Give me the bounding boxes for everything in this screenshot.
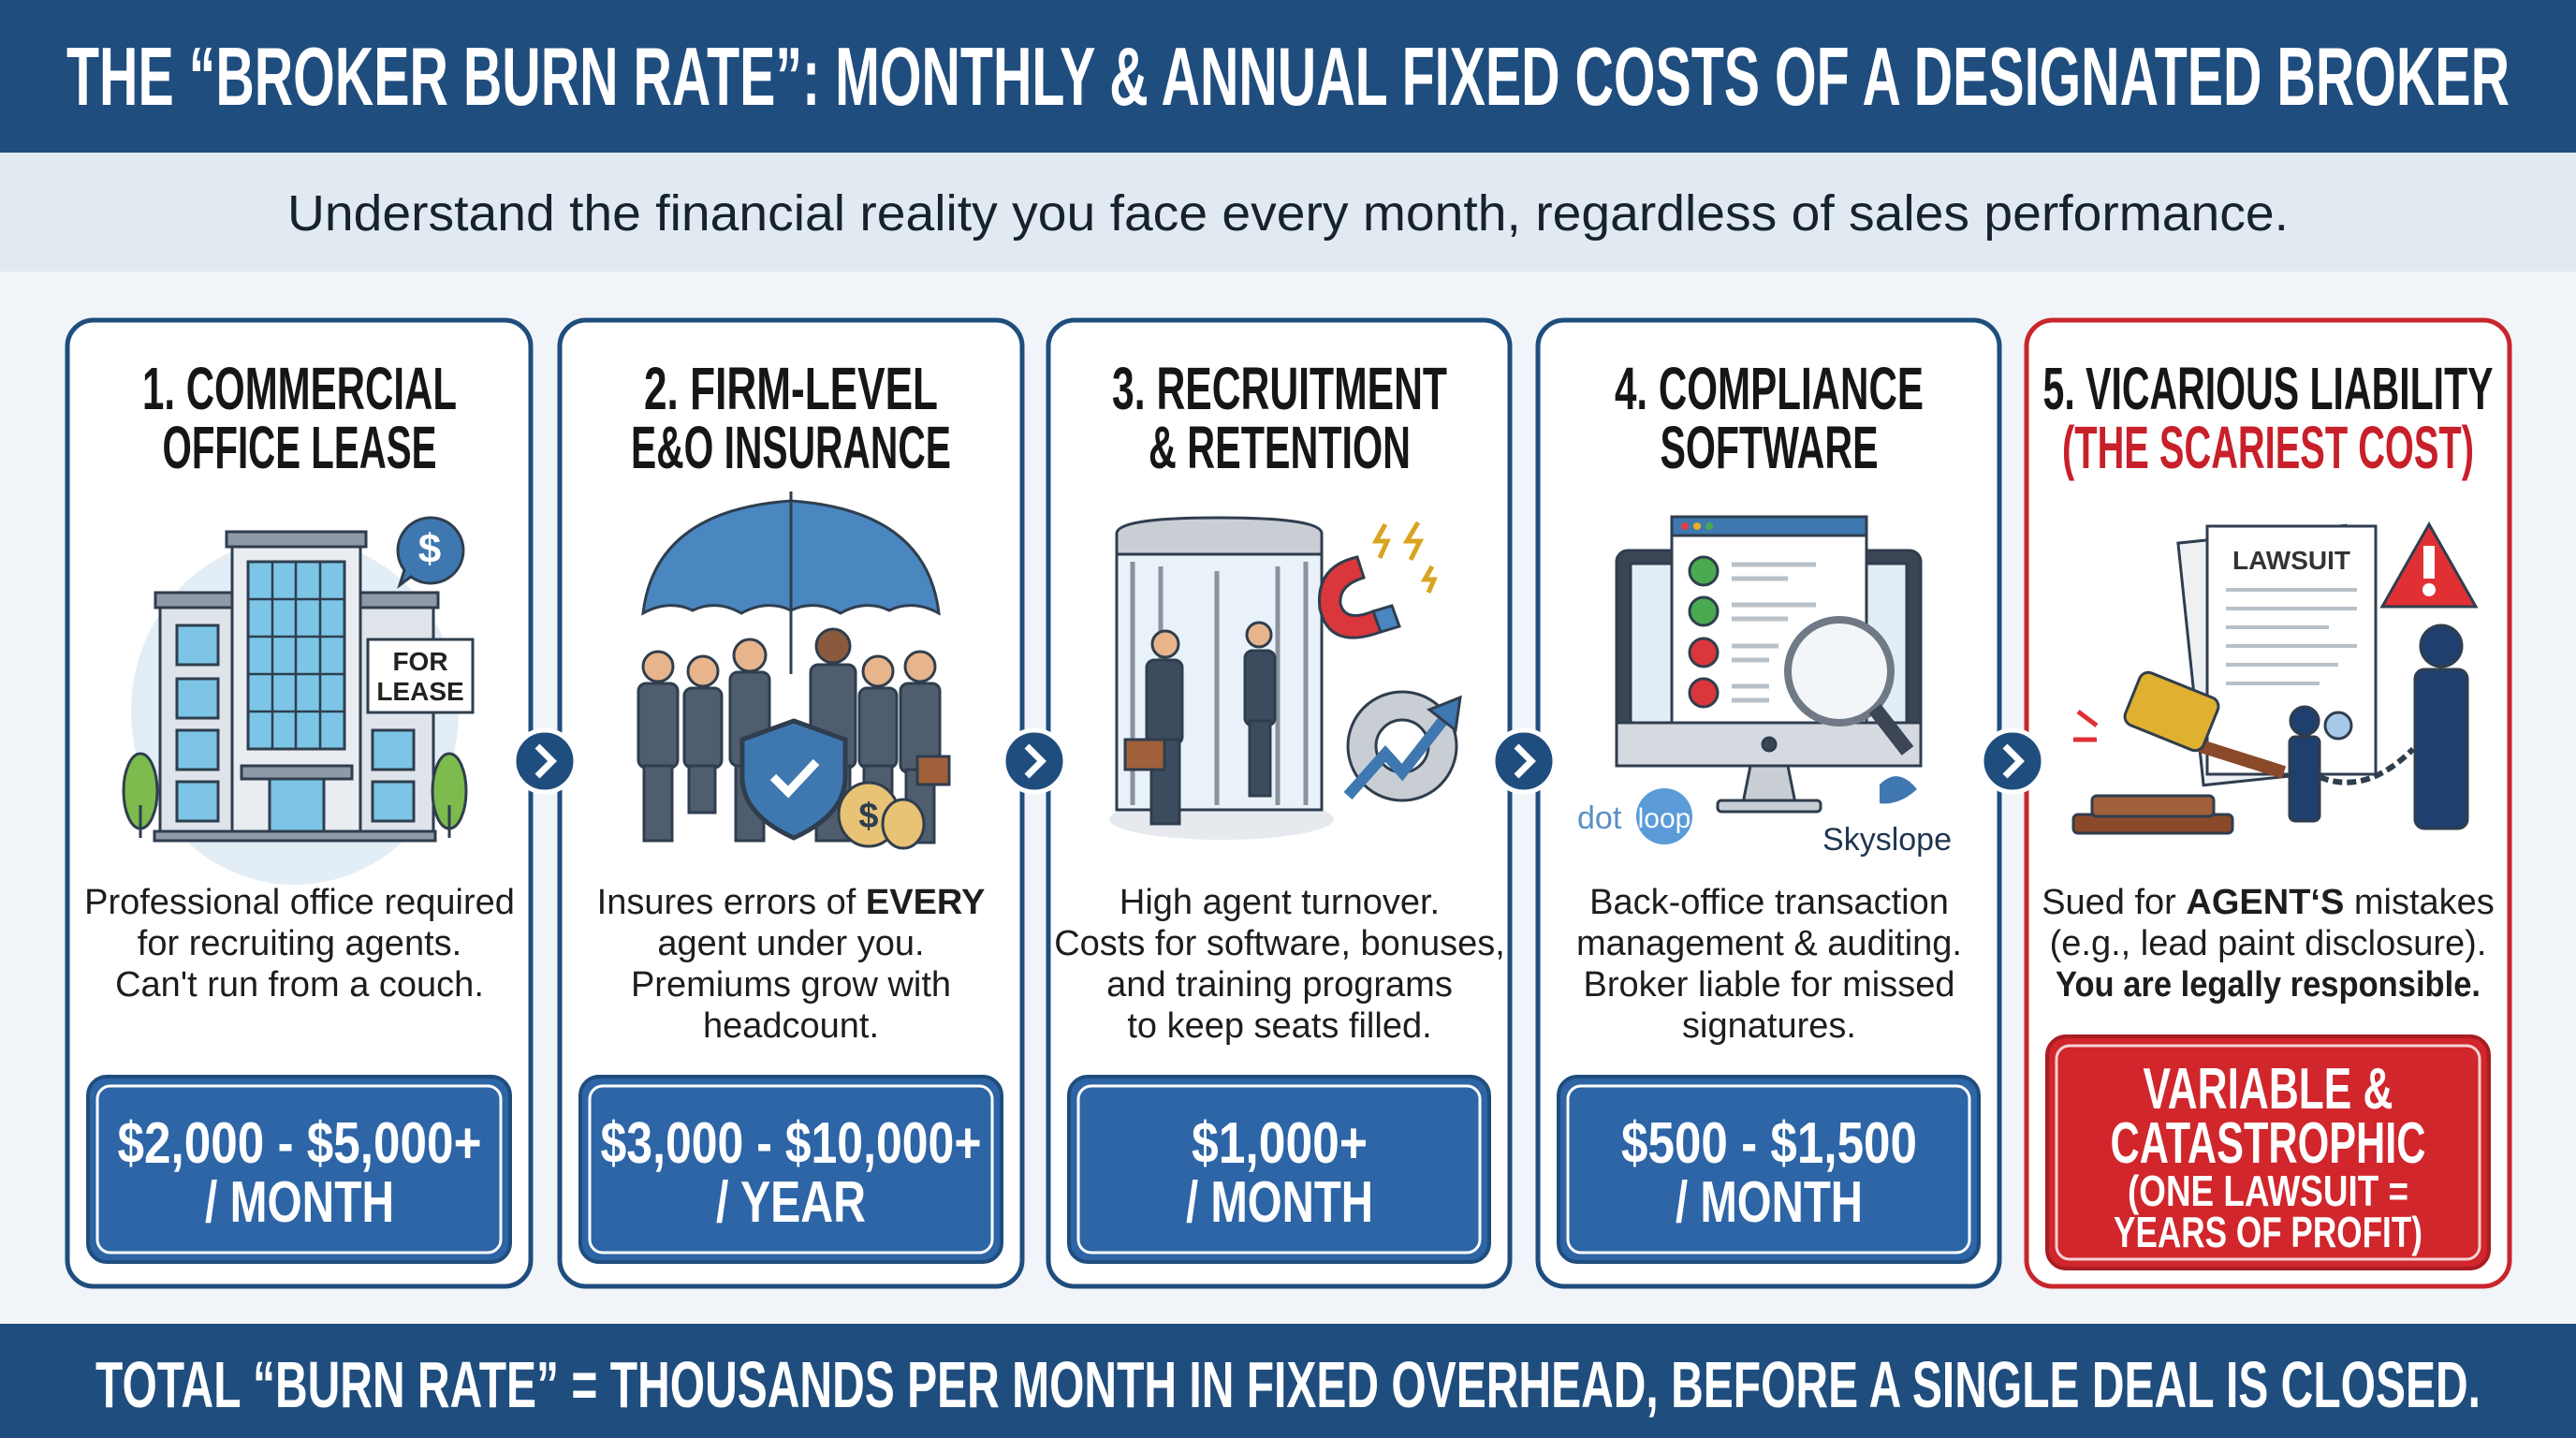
panel: E&O insurance — [560, 320, 1022, 1286]
icon: office building: LEASE — [376, 677, 464, 706]
heading: card 4 — [1615, 355, 1924, 481]
price: card 4 — [1559, 1077, 1979, 1262]
panel: compliance software — [1538, 320, 1999, 1286]
icon: lawsuit, gavel, warning — [2073, 524, 2476, 833]
text: card 4 description — [1576, 883, 1962, 1046]
subtitle: Understand the financial reality you face every month, regardless of sales performance. — [287, 185, 2289, 242]
panel: vicarious liability — [2027, 320, 2510, 1286]
price: card 2: $3,000 - $10,000+ — [601, 1111, 981, 1176]
text: card 5 description — [2042, 883, 2495, 1005]
icon: umbrella over team: $ — [858, 797, 879, 836]
text: card 1 description: Can't run from a couch. — [115, 965, 484, 1005]
arrow: 1 to 2 — [514, 730, 576, 792]
heading: card 3 — [1112, 355, 1447, 481]
icon: umbrella over team — [638, 492, 949, 848]
text: card 4 description: Back-office transaction — [1589, 883, 1949, 922]
text: card 3 description: and training programs — [1106, 965, 1453, 1005]
text: card 2 description: Insures errors of EVERY — [597, 883, 985, 922]
heading: card 1: OFFICE LEASE — [163, 414, 436, 481]
heading: card 3: & RETENTION — [1149, 414, 1411, 481]
heading: card 2: E&O INSURANCE — [631, 414, 951, 481]
text: card 3 description: to keep seats filled. — [1127, 1006, 1432, 1046]
text: card 1 description: for recruiting agents. — [138, 924, 461, 963]
icon: monitor with checklist: loop — [1638, 803, 1690, 834]
arrow: 3 to 4 — [1493, 730, 1555, 792]
text: card 2 description: Premiums grow with — [631, 965, 951, 1005]
panel: recruitment & retention — [1048, 320, 1510, 1286]
heading: card 1 — [142, 355, 457, 481]
text: card 5 description: Sued for AGENT‘S mistakes — [2042, 883, 2495, 922]
heading: card 1: 1. COMMERCIAL — [142, 355, 457, 422]
icon: lawsuit, gavel, warning: LAWSUIT — [2232, 546, 2350, 575]
price: card 3: $1,000+ — [1192, 1111, 1368, 1176]
text: card 2 description: headcount. — [703, 1006, 879, 1046]
price: card 1 — [88, 1077, 510, 1262]
price: card 5: CATASTROPHIC — [2110, 1111, 2426, 1176]
heading: card 3: 3. RECRUITMENT — [1112, 355, 1447, 422]
icon: monitor with checklist: dot — [1577, 800, 1622, 836]
price: card 4: / MONTH — [1676, 1170, 1863, 1235]
price: card 3 — [1069, 1077, 1489, 1262]
icon: office building — [124, 518, 473, 885]
price: card 5: VARIABLE & — [2144, 1057, 2393, 1122]
text: card 5 description: You are legally responsible. — [2056, 965, 2481, 1005]
subtitle — [0, 153, 2576, 271]
price: card 4: $500 - $1,500 — [1621, 1111, 1917, 1176]
heading: card 2: 2. FIRM-LEVEL — [644, 355, 938, 422]
icon: revolving door, magnet, gear — [1109, 518, 1460, 840]
panel: commercial office lease — [67, 320, 531, 1286]
price: card 3: / MONTH — [1186, 1170, 1373, 1235]
title bar — [0, 0, 2576, 153]
arrow: 4 to 5 — [1982, 730, 2043, 792]
text: card 3 description — [1054, 883, 1505, 1046]
icon: office building: $ — [418, 526, 441, 572]
price: card 5 — [2047, 1036, 2489, 1269]
text: card 1 description — [84, 883, 515, 1005]
price: card 1: $2,000 - $5,000+ — [118, 1111, 481, 1176]
text: card 4 description: signatures. — [1682, 1006, 1856, 1046]
icon: monitor with checklist: Skyslope — [1822, 822, 1952, 858]
price: card 1: / MONTH — [205, 1170, 394, 1235]
heading: card 4: SOFTWARE — [1661, 414, 1878, 481]
price: card 2 — [580, 1077, 1002, 1262]
price: card 5: (ONE LAWSUIT = — [2128, 1167, 2408, 1215]
text: card 4 description: Broker liable for missed — [1583, 965, 1955, 1005]
price: card 2: / YEAR — [716, 1170, 866, 1235]
text: card 2 description: agent under you. — [657, 924, 925, 963]
heading: card 4: 4. COMPLIANCE — [1615, 355, 1924, 422]
arrow: 2 to 3 — [1003, 730, 1065, 792]
heading: card 5 — [2042, 355, 2494, 481]
price: card 5: YEARS OF PROFIT) — [2114, 1208, 2422, 1256]
text: card 4 description: management & auditing. — [1576, 924, 1962, 963]
icon: monitor with checklist — [1577, 517, 1952, 858]
icon: office building: FOR — [392, 647, 448, 676]
text: card 3 description: Costs for software, bonuses, — [1054, 924, 1505, 963]
text: card 2 description — [597, 883, 985, 1046]
text: card 5 description: (e.g., lead paint disclosure). — [2050, 924, 2486, 963]
footer bar — [0, 1324, 2576, 1438]
text: card 3 description: High agent turnover. — [1120, 883, 1440, 922]
text: card 1 description: Professional office required — [84, 883, 515, 922]
heading: card 2 — [631, 355, 951, 481]
